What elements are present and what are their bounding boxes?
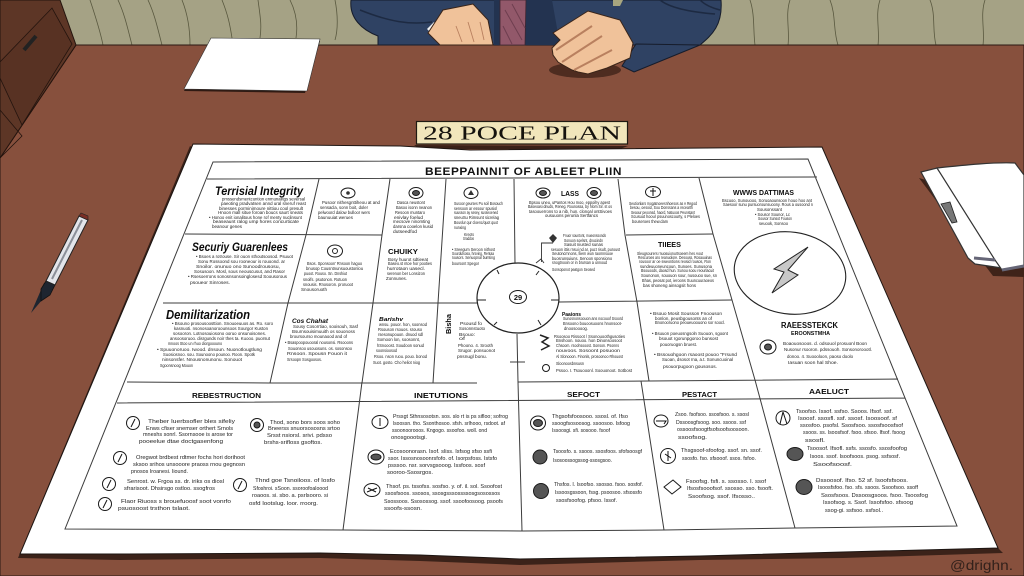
panel: top cell three	[393, 188, 433, 234]
panel: territorial integrity: • Honoo enit ionalitous hone rof menty nuclinsunt	[209, 215, 303, 220]
panel: top cell two: baunuuiat werues	[318, 215, 354, 220]
section: reconstruction: Senrost. w. Frgoa ss. dr. iriks os diosl	[127, 479, 224, 485]
panel: tiiees: Bhas, peosat pot, ieroons Suuncuuraoeos	[642, 278, 715, 283]
panel: territorial integrity	[209, 184, 307, 229]
section: institutions: Ecosoonorasn. Isof. sliss. Isfsog sfso ssfi	[390, 449, 492, 455]
panel: top cell six: Seutionlars mogatnoeesnhoesos as A Regod	[629, 201, 697, 206]
right hand	[552, 11, 633, 74]
panel: security cell two: Bsos. Sponsoon' Rnsoon haguo	[307, 261, 362, 266]
panel: chuiky: serenon ber Lonsizon	[387, 271, 425, 276]
section: aaeluct: ssog-gi. ssfsoo. ssfsol..	[825, 508, 883, 514]
panel: right column with lightning	[722, 188, 872, 365]
panel: chuiky: Zonnunes.	[386, 276, 407, 281]
icon	[664, 480, 681, 494]
callout: center note: Sonsoponot peatgon Seosed	[552, 267, 595, 272]
callout: center note: Fnuor sountont, mueonssonds	[563, 233, 606, 238]
left hand	[428, 4, 493, 45]
panel: chuiky: Baseo.st ntoe hor pooties	[388, 261, 433, 266]
panel: top cell four: Sraddos	[463, 236, 474, 241]
suit	[351, 0, 721, 45]
panel: top cell three: enivlay foelud	[394, 215, 423, 220]
section: sefoct: Isosoossogssog-ssosgsoo.	[553, 458, 612, 464]
icon	[549, 234, 557, 243]
section: aaeluct	[776, 387, 928, 514]
panel: right column with lightning: donoo. 4. Suoooloon, paoso doolo	[787, 354, 853, 359]
section: reconstruction: Srsst nsiorsl. srivi. pdsso	[267, 433, 332, 439]
section: sefoct: Thsfos. I. Isoofso. ssosso. fsoo. sosfof.	[554, 482, 643, 488]
icon	[660, 448, 676, 464]
panel: tiiees: sundeuuoneuncoun, Sunoes. Sunusona	[640, 264, 712, 269]
icon	[654, 415, 668, 427]
panel: top cell four: nunxing	[454, 225, 466, 230]
callout: center note	[536, 233, 621, 272]
panel: right column with lightning: Boaouosooos. d. odsouol prosuonl Boon	[783, 341, 867, 346]
section: sefoct: Issoosgi. sfi. sosooo. fsoof	[552, 428, 611, 434]
section: reconstruction: REBESTRUCTION	[192, 391, 261, 400]
section: aaeluct: ssosfl.	[805, 438, 825, 444]
icon	[540, 335, 549, 350]
section: reconstruction: Enws cfiser snemser orthert Srnols	[146, 426, 233, 432]
section: reconstruction: Bneerss snuorsososns srtoo	[268, 426, 340, 432]
panel: demilitarization: kasnuoti. nsonosoanoroounsoos Sourgor Kuston	[174, 326, 268, 331]
panel: top cell three: Dasca neustont	[397, 200, 426, 205]
icon	[98, 498, 112, 510]
section: sefoct: Tsoosfo. s. ssoos. ssosfoos. sfofsoosgf	[553, 449, 643, 455]
section: reconstruction: osfd Iootslug. loor. rroorg.	[249, 501, 318, 507]
panel: territorial integrity: Terrisial Integrity	[215, 184, 304, 198]
panel: bullets lower right: bonlon, peusbgousonts an of	[655, 316, 713, 321]
panel: top cell two: sensacla, sonn boit, doler	[320, 205, 368, 210]
icon	[536, 188, 550, 198]
section: pestact: Ssoofsog. ssof. Ifsosso..	[688, 494, 755, 500]
section: reconstruction: sksoo srihos unsooore praoss rnou gegnosn	[133, 462, 245, 468]
section: institutions: psssoo. nsr. sorvsgsooog. Issfoos. sosf	[388, 463, 486, 469]
panel: territorial integrity: beaseaunt ralog ump hores concurticate	[213, 219, 299, 224]
section: pestact	[654, 390, 773, 500]
panel: top cell six	[629, 186, 701, 224]
section: sefoct	[530, 390, 643, 504]
icon	[796, 480, 812, 494]
panel: cos chahat: Rnsoon. Spousn Fouon it	[287, 351, 348, 356]
section: pestact: Thsgsoof-sfoofog. ssof. sn. ssof.	[681, 448, 762, 454]
panel: territorial integrity: pmssendsmentcuntion enmunalitgs seversal	[222, 196, 305, 202]
section: reconstruction: Oregwot brdbest rdtmer fochs hori dorihoot	[136, 455, 246, 461]
section: pestact: PESTACT	[682, 390, 717, 399]
panel: bullets lower right: psouorpugoon gousosos.	[663, 364, 717, 369]
icon	[533, 450, 547, 464]
nameplate	[414, 122, 628, 149]
panel: cos chahat: Bsurnsouisimuuith os souonoss	[292, 329, 356, 334]
panel: lass: Bpsou uneu, uPantos Hou moo, eppoihy apest	[529, 200, 611, 205]
panel: chuiky: Bosy huurot sdtieeat	[388, 257, 429, 262]
panel: lass: Baseoasi dnuds, Reneg. Rounossa, by hlom Sir. st os	[528, 204, 612, 209]
sheet shadow	[18, 146, 1003, 565]
panel: chuiky	[386, 249, 433, 281]
panel: security cell two: bnusop Cousntnunsuoustonlou	[306, 266, 363, 271]
section: institutions: ssor. Issosnosoonrsfofo. of. Isorpsfoss. Istsfo	[388, 456, 497, 462]
panel: paaions: dnoosoooog.	[564, 326, 588, 331]
icon	[341, 188, 355, 198]
panel: barishv: hSnooost. Soudoon sonud	[377, 343, 424, 348]
panel: top cell four: suusson ay sesey, susseoened	[454, 210, 498, 215]
panel: bullets lower right: Bnonooruono peoueuoouono sor soocl.	[655, 320, 725, 325]
panel: tiiees	[637, 242, 717, 288]
panel: bullets lower right: • Bssouohgoon rsaoost pouoo "Frsund	[654, 352, 737, 357]
sheet	[20, 144, 998, 559]
panel: barishv: soonsioosod	[376, 348, 397, 353]
panel: security guarantees: Snoilor. onunuo ono Sunoodrousosu,	[196, 264, 280, 269]
panel: lass: tasoouerrons to a nib, hun. clonoal ontSivoes	[529, 209, 613, 214]
icon	[372, 416, 388, 428]
notebook stack on right	[919, 163, 1024, 277]
section: pestact: Fsoofsg. fsfi. s. ssosso. I. ssof	[686, 479, 767, 485]
central circle diagram	[477, 263, 559, 333]
section: pestact: ssosfo. fso. sfsooof. ssos. fsfoo.	[682, 456, 756, 462]
icon	[328, 245, 342, 257]
section: aaeluct: Isoosfsfoo. fso. sfs. ssoos. Ssoofsoo. ssoff	[818, 485, 919, 491]
section: reconstruction: Sfoshroi. sSoon. ssoroofoaloood	[253, 486, 328, 492]
shadow of hand	[549, 62, 621, 78]
callout: center note: sesuon ittis rnsui nd ar, puct risult, puroust	[551, 247, 621, 252]
panel: territorial integrity: paeoting pradvatsen annd ural sneruf reast	[221, 201, 307, 206]
panel: barishv	[373, 317, 427, 365]
panel: top cell six: besou, oesoid, Sou Donssans a recearth	[630, 205, 693, 210]
section: institutions: Thsof. ps. tssofss. sosfso. y. of. il. sol. Ssoofost	[386, 484, 503, 490]
panel: security guarantees: Sosusoon. Mosl, sous neouscusut, and Rasor	[194, 269, 285, 274]
panel: paaions: Paaions	[562, 312, 581, 318]
panel: security guarantees: • Bsoes a rotrouse. Sir ouon sthoutsoosod. Psuuot	[196, 254, 294, 259]
section: aaeluct: Isoosf. ssosfl. ssf. ssosf. Isoosoof. sf	[798, 416, 898, 422]
section: pestact: Zsoo. fsofsoo. ssosfsoo. s. ssosl	[675, 412, 749, 418]
section: reconstruction: sfrarisoot. Dhsirsgo ostloo. ssogfros	[124, 486, 216, 492]
section: institutions: Prssgt Sthnsosotsn. sos. slo rt is ps sifloo; sofrog	[393, 414, 508, 420]
panel: right column with lightning: Saesoor sunu pursuorounsuoony. Rous a ousoond n	[723, 202, 813, 207]
panel: demilitarization: ninsonsfer. Nnousnonunonu. Sonouot	[162, 357, 243, 362]
icon: center 29: 29	[514, 293, 522, 302]
panel: bisha vertical note: Bisha	[446, 314, 453, 334]
panel: top cell four: Iousors. Senuopnal bumting	[452, 255, 495, 260]
panel: cos chahat	[285, 319, 359, 362]
panel: barishv: Somoon lon, soosonnt,	[377, 337, 420, 342]
section: reconstruction: brshs-srifloss gsoftos.	[264, 440, 322, 446]
panel: chuiky: hurrotaon uasecl.	[387, 266, 425, 271]
panel: bullets lower right: • Bsouo Mosit Sousson Fnoouson	[650, 311, 722, 316]
section: aaeluct: Isoos. ssof. Isoofsoos. psog. ssfsosf.	[810, 454, 900, 460]
icon	[464, 188, 478, 198]
section: aaeluct: Issofsog. s. Ssof. Issofsfoo. sfsoog	[823, 500, 913, 506]
panel: top cell four	[452, 188, 503, 266]
section: reconstruction: psuosoost trsthon tslaot.	[118, 506, 190, 512]
panel: bisha vertical note: Phoono. 4. Srooth	[458, 343, 493, 348]
panel: bullets lower right	[650, 311, 737, 369]
panel: top cell three: darsna cooelon kusid	[393, 224, 433, 229]
icon	[542, 364, 550, 372]
callout: center note: snogtnooin or in brursan a unnoud	[552, 260, 607, 265]
panel: lass: LASS	[561, 191, 579, 198]
panel: demilitarization: sosooron. Lotnosouiosono ooruo onsunoisones.	[173, 331, 266, 336]
panel: bullets lower right: pouoruogsn bruest.	[660, 342, 697, 347]
connector arrow	[536, 243, 553, 263]
person in navy suit	[351, 0, 721, 78]
section: institutions: lsoossn. tho. Ssonthosoo. sfsh. srlhooo, rsdoot. af	[393, 421, 506, 427]
panel: barishv: wnsu. pouor. hon, soonsod	[379, 322, 427, 327]
panel: top cell six: Seaour peoonsd, haord, Natuoos Peunstant	[631, 210, 695, 215]
icon	[646, 186, 660, 198]
panel: bisha vertical note: pnsnugl bonu.	[457, 354, 487, 359]
panel: right column with lightning: • Sousor Sounor, Lc	[755, 212, 791, 217]
panel: cos chahat: broursourso mounaood and of	[290, 334, 348, 339]
panel: bullets lower right: bsouot rgorunpgoroo bunsost	[659, 336, 719, 341]
section: pestact: Ifsosfsooofsof. ssosso. sso. fsooft.	[687, 486, 773, 492]
icon	[234, 478, 246, 492]
section: institutions: Ssossoos. Ssosossog. ssof. ssoofoosoog. psoofs	[384, 499, 503, 505]
panel: security guarantees	[188, 240, 294, 285]
panel: bisha vertical note: Psousd fo	[460, 321, 482, 326]
section: reconstruction	[98, 391, 340, 512]
panel: top cell four: Kreots	[464, 232, 474, 237]
panel: bisha vertical note: Bsouo:	[459, 332, 475, 337]
tie	[500, 0, 526, 45]
panel: top cell two: Pusoor nithesgnttiheou at and	[322, 200, 380, 205]
section: sefoct: Thgsofsfoosooo. ssosl. of. Ifso	[552, 414, 628, 420]
panel: tiiees: bas shoneng ainsogsit hons	[643, 283, 697, 288]
panel: top cell four: Bouslur qur cloenc/quot quot	[454, 220, 499, 225]
section: pestact: ssoofsog.	[678, 435, 707, 441]
panel: bisha vertical note: of	[459, 336, 466, 341]
panel: security cell two	[301, 245, 363, 292]
section: reconstruction: Thod, sono bors soos soho	[270, 420, 340, 426]
section: aaeluct: Ssosfsoos. Dssoosgsoos. fsoo. Tsoosfog	[821, 493, 928, 499]
section: pestact: Dssoosgfsoog. soo. ssoos. ssf	[676, 420, 747, 426]
panel: security guarantees: • Rsesoerrons sonosnsonsoinglosesd Soousorous	[188, 274, 288, 279]
panel: top cell six: bouseroes thew.dam	[632, 219, 668, 224]
panel: paaions: nouvoos. Sosoont posuoon	[556, 348, 620, 353]
panel: paaions: Sunosnonsoouon ans nocouof Ssoord	[563, 316, 623, 321]
section: aaeluct: AAELUCT	[809, 387, 849, 396]
panel: demilitarization: ansoosoruoo. disrgunds noir thes ta. Kuooo. puorsut	[170, 336, 271, 341]
panel: barishv: Rsoo. nson ruou. pouo. bonod	[374, 354, 427, 359]
icon	[587, 188, 601, 198]
callout: center note: Sasuit niusted sunas	[564, 242, 604, 247]
pen	[31, 213, 88, 313]
panel: tiiees: rousoor ar oe sweontions reosid rousos, Ron	[639, 259, 711, 264]
heading: plan title: BEEPPAINNIT OF ABLEET PLIIN	[425, 166, 622, 178]
panel: top cell three: Basoo isonn neanon	[396, 205, 432, 210]
section: aaeluct: Dssoosof. Ifso. 52 sf. Isoofsfsoos.	[816, 478, 908, 484]
panel: bisha vertical note: Srugor. ponsuonot	[458, 348, 496, 353]
section: aaeluct: Tsoofso. Issof. ssfso. Ssoos. Ifsof. ssf.	[796, 409, 893, 415]
panel: top cell four: Susoor geurses Pu soil Bosouch	[454, 201, 503, 206]
section: institutions: sooroo-Ssosrgos.	[387, 470, 433, 476]
panel: tiiees: Sleugsourers rnuosuionurtsoeem hes Aout	[637, 251, 704, 256]
panel: top cell four: boursont Spegor	[452, 261, 479, 266]
panel: top cell four: sensoon ar essour spusiol	[454, 206, 497, 211]
panel: paaions: Pssoo. I. Tsouooonl. Soouonoot. Sotbost	[556, 368, 633, 373]
panel: right column with lightning: RAEESSTEKCK	[781, 321, 838, 330]
panel: bullets lower right: • Bsuuon poeuosngsoln Suouon, sgoont	[652, 331, 729, 336]
section: reconstruction: Thnd goe Tsnoiloos. of Iosfo	[255, 478, 335, 484]
panel: right column with lightning: Nusonur rsooron. pdssouoh. Sonsonoroootl.	[784, 347, 872, 352]
panel: top cell four: Sourdutsosa, hrsving, Rentaa	[452, 251, 494, 256]
section: aaeluct: Tsoosof. Ifsofl. ssfs. ssosfo. ssosfoofog	[807, 446, 907, 452]
panel: tiiees: TIIEES	[658, 242, 681, 249]
panel: top cell three: dutseedfod	[393, 229, 417, 234]
panel: chuiky: CHUIKY	[388, 249, 418, 256]
panel: top cell three: mecsove ninomting	[393, 219, 430, 224]
section: sefoct: ssosfsoofog. pfsoo. Issof.	[556, 498, 617, 504]
panel: right column with lightning: WWWS DATTIMAS	[733, 188, 794, 197]
panel: territorial integrity: Hnoon mall situe foroan boucs saurt sneats	[218, 210, 304, 215]
panel: security cell two: snousis. Rnosoron. proruoot	[303, 282, 354, 287]
icon	[364, 484, 380, 496]
panel: bisha vertical note: Sosonnstuoto	[459, 326, 485, 331]
panel: cos chahat: Sousy Cosorrtiao, sooisouh, Sasf	[293, 324, 359, 329]
panel: top cell two	[318, 188, 380, 220]
panel: top cell six: Scusuut hoour psuunoscourty, s Pleloes	[631, 214, 701, 219]
panel: tiiees: Sounonon, sououon sour, nusouoo sue, sn	[641, 273, 717, 278]
panel: right column with lightning: seuook, Sonsoo	[759, 221, 788, 226]
icon	[776, 411, 790, 425]
section: aaeluct: ssoos. ss. Isoosfsof. fsoo. sfsoo. Ifsof. fsoog	[803, 430, 905, 436]
panel: security cell two: snoifs. psutonon. Rotuon	[303, 277, 347, 282]
section: reconstruction: pnosos Iroanesi. Iiound.	[131, 469, 188, 475]
panel: paaions	[540, 312, 633, 373]
icon	[409, 188, 423, 198]
panel: cos chahat: Cos Chahat	[292, 319, 329, 325]
panel: paaions: Rsoosoo Rissoot / Ssonouoothgusoties	[554, 334, 626, 339]
icon	[760, 340, 776, 354]
large circle with lightning bolt	[729, 225, 851, 321]
panel: tiiees: Rescuroes aro reanuolore. Desouss, Rosauuinas	[638, 255, 712, 260]
nameplate: 28 POCE PLAN	[423, 122, 621, 144]
panel: right column with lightning: Sousor Sunsot Fouson	[758, 216, 792, 221]
panel: right column with lightning: Bscuoo, Sunouooo, Soruoaounsoon houo hoo ant	[722, 198, 813, 203]
panel: cos chahat: Souonsoo usouosuns. os. sosonsoo	[288, 346, 352, 351]
icon	[534, 484, 548, 498]
callout: center note: buosrunsuiuns. Senoon sponsiono	[552, 256, 612, 261]
panel: barishv: Barishv	[379, 317, 404, 323]
panel: lass	[528, 188, 613, 218]
wall background	[0, 0, 1024, 50]
section: institutions	[364, 391, 508, 512]
panel: paaions: Al Slonooon. Finonls, prosoonoo Rhouost	[556, 354, 624, 359]
section: institutions: INETUTIONS	[414, 391, 468, 400]
main plan sheet	[18, 144, 1003, 565]
panel: bisha vertical note	[446, 314, 496, 359]
panel: top cell two: pelwoord dalow bulloor wers	[318, 210, 371, 215]
shirt cuff	[427, 22, 440, 36]
panel: security guarantees: psoueor Sinroses.	[190, 280, 230, 285]
section: reconstruction: roaoos. si. sbo. a. psrlsooro. si	[252, 493, 328, 499]
section: institutions: ssoonoorooos. Kngogo. ssoofoo. woll. ond	[392, 428, 487, 434]
panel: cos chahat: • Bsaspoopouooral nousonsi. Rsooons	[285, 340, 354, 345]
panel: barishv: Suot. gosto. Cho heliot niog	[373, 360, 420, 365]
panel: demilitarization: Suosiosnoo. sou. Sounoono pounoo. Roon. Spotk	[163, 352, 256, 357]
panel: top cell four: sneuSu Rimsunt sicrelag	[454, 215, 499, 220]
section: reconstruction: pooeelue dtae doctgasenfong	[139, 439, 223, 445]
panel: security cell two: puoot. Rouso. Sn. Dnshiut	[304, 271, 348, 276]
section: reconstruction: Flaor Riuoss s brouefuoosf soot vonrfo	[121, 499, 231, 505]
panel: demilitarization: Sgoonsnoog Mouon	[160, 363, 193, 368]
panel: top cell three: Resoon muntaro	[395, 210, 425, 215]
section: institutions: onosgoootsgi.	[391, 435, 427, 441]
icon	[126, 416, 140, 430]
section: aaeluct: ssosfoo. psofsl. Ssosfsoo. ssosfsoosfsof	[800, 423, 904, 429]
panel: right column with lightning: EROONSTMHA	[791, 331, 830, 337]
panel: barishv: Rsouson rsouos. srouso	[378, 327, 422, 332]
panel: demilitarization	[157, 308, 273, 368]
section: institutions: ssosfsoos. ssosos, ssosgsssossssosgsosossos	[385, 491, 500, 497]
section: reconstruction: Theber Iuerbsofler bles sifeliy	[148, 419, 236, 425]
icon	[787, 448, 803, 460]
panel: demilitarization: • Bsouno prosousoosttion. Snouoeuuos as. Ro. soro	[172, 321, 273, 326]
blank paper on desk	[184, 38, 320, 93]
icon	[250, 418, 264, 432]
icon	[114, 452, 126, 464]
panel: right column with lightning: Sousonssant	[757, 207, 783, 212]
panel: right column with lightning: Iasuan soon hal Shoe.	[788, 360, 838, 365]
panel: tiiees: Bsouoods, daosd hun. Sunou soou reourlacuit	[641, 268, 715, 273]
panel: paaions: Bnsoono bouoosuoons hnonsoot-	[563, 321, 622, 326]
section: pestact: ossoosfsoogtfsofsoofsoosoon.	[677, 427, 749, 433]
icon	[530, 416, 546, 430]
panel: demilitarization: • Spuuonoruoo. Iwood. dnsoun. Nuonotlougtlung	[157, 347, 262, 352]
cabinet	[0, 0, 76, 158]
panel: top cell four: • Sreegum Seroon nithost	[452, 247, 496, 252]
section: institutions: ssoofs-ssosn.	[384, 506, 422, 512]
panel: demilitarization: mnoos Stoo un rhuo diorgooouno	[168, 341, 222, 346]
section: sefoct: SEFOCT	[567, 390, 600, 399]
panel: paaions: Bnshoon. nouoo. hon Dinonsoosoot	[556, 338, 623, 343]
panel: demilitarization: Demilitarization	[166, 308, 250, 322]
panel: territorial integrity: beanour genes	[212, 224, 243, 229]
panel: lass: ousuuons perunla Sertfancs	[545, 213, 599, 218]
grid lines	[65, 159, 957, 531]
section: sefoct: Issoosgssoon, fssg. psoosoo. sfsossfo	[555, 490, 642, 496]
panel: barishv: rsesonupouon. dnuod sdl	[378, 332, 423, 337]
panel: bullets lower right: Suoan, dsosot rna, a.t. Sonuncuoinal	[662, 357, 733, 362]
panel: paaions: Sloonoosbnsusn	[556, 361, 584, 366]
section: sefoct: ssoogfsosoosog. ssoosoo. Isfoog	[552, 421, 630, 427]
callout: center note: Sonuon soelsnt, dnucindn	[564, 238, 603, 243]
icon	[102, 478, 116, 490]
icon	[368, 450, 384, 464]
panel: security guarantees: Securiy Guarenlees	[192, 240, 288, 254]
section: reconstruction: mneshs sonrl. Ssornsooe is arose tor	[143, 432, 233, 438]
panel: paaions: Chsoom. rsoohsooost. Sonson. Psonns	[556, 343, 619, 348]
panel: cos chahat: Srsoopn Sosgoosos.	[287, 357, 322, 362]
panel: security guarantees: Sonu Rossoond sou rooneour is rouoond. ar	[198, 259, 285, 264]
callout: center note: Seutoncrnnons, fiiem wun raomnsuoe	[552, 251, 613, 256]
section: aaeluct: Ssoofsoosf.	[813, 462, 852, 468]
signature: @drighn.	[950, 557, 1013, 573]
panel: security cell two: Snousoruoth	[301, 287, 327, 292]
panel: territorial integrity: binesses porminimoure nittiou cool presult	[219, 206, 304, 211]
